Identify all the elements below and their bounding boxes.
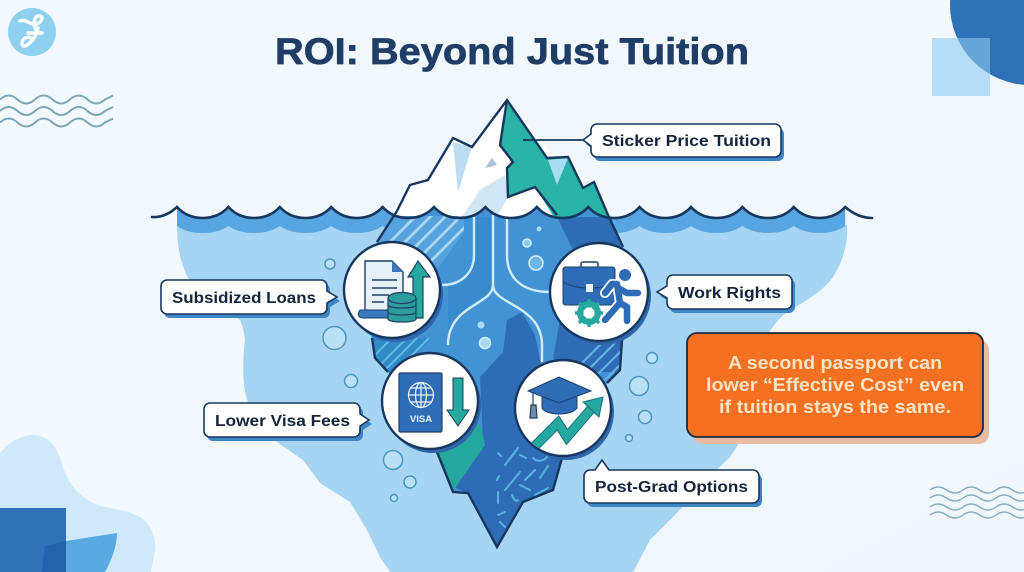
iceberg above water [395, 100, 610, 222]
title: ROI: Beyond Just Tuition [275, 31, 749, 72]
label: lower visa fees [204, 403, 372, 441]
icon: tray [358, 310, 392, 318]
decoration: left waves [0, 96, 113, 126]
label: work rights [657, 275, 795, 313]
waterline [152, 207, 872, 218]
icon: document [365, 261, 403, 312]
hatched area lower right [581, 343, 620, 382]
hatched area lower left [373, 338, 432, 372]
label: lower visa fees: Lower Visa Fees [215, 413, 350, 430]
icon: passport [399, 373, 442, 432]
decoration: right waves [930, 487, 1024, 518]
icon: briefcase [563, 267, 615, 305]
icon: gear [575, 299, 603, 327]
icon: up arrow [408, 261, 430, 318]
iceberg tip: outline [397, 100, 608, 215]
callout [687, 333, 989, 444]
callout: A second passport can [728, 353, 942, 373]
label: post-grad options: Post-Grad Options [595, 479, 748, 496]
circle: work rights [550, 243, 651, 345]
icon: cap base [542, 394, 577, 414]
central channel [448, 217, 493, 330]
icon: briefcase handle [581, 262, 598, 269]
iceberg tip: teal face [500, 100, 610, 222]
water body [177, 225, 847, 572]
label: subsidized loans: Subsidized Loans [172, 290, 316, 307]
icon: down arrow [447, 378, 469, 426]
passport text: VISA [410, 414, 432, 425]
sticker price leader line [523, 139, 584, 141]
dark facet right [553, 217, 640, 372]
icon: document lines [372, 280, 397, 302]
icon: cap top [528, 377, 591, 403]
circle: subsidized loans [344, 242, 443, 342]
icon: logo [8, 8, 56, 56]
circle: lower visa fees [382, 353, 481, 453]
label: sticker price tuition [583, 124, 784, 161]
circle: post-grad options [515, 360, 614, 460]
callout: lower “Effective Cost” even [706, 375, 964, 395]
label: work rights: Work Rights [678, 285, 781, 302]
icon: growth arrow [530, 397, 603, 451]
icon: running person [605, 269, 638, 321]
icon: coins [388, 292, 416, 322]
bubbles outside iceberg [323, 259, 658, 502]
iceberg body outline [372, 211, 623, 547]
iceberg body [355, 207, 640, 547]
label: sticker price tuition: Sticker Price Tuition [602, 133, 771, 150]
decoration: bottom left shapes [0, 435, 155, 572]
label: post-grad options [584, 460, 762, 507]
iceberg below water [370, 208, 624, 550]
inner veins [442, 215, 550, 362]
hatched area left [377, 216, 464, 268]
water surface band [177, 207, 845, 233]
iceberg tip: pale facet [548, 158, 568, 185]
inner bubbles [478, 226, 543, 348]
iceberg tip: shaded facets [453, 142, 508, 220]
icon: document fold [392, 261, 403, 272]
dark central band [455, 312, 562, 547]
icon: briefcase seam [563, 282, 615, 288]
teal facet [437, 423, 485, 492]
label: subsidized loans [161, 280, 340, 318]
icon: tassel [530, 392, 537, 418]
icon: globe [408, 382, 434, 408]
callout: if tuition stays the same. [719, 397, 951, 417]
icon: clasp [586, 284, 593, 292]
iceberg tip: snow [395, 100, 608, 222]
speckled texture [497, 448, 548, 527]
decoration: top right shapes [932, 0, 1024, 96]
